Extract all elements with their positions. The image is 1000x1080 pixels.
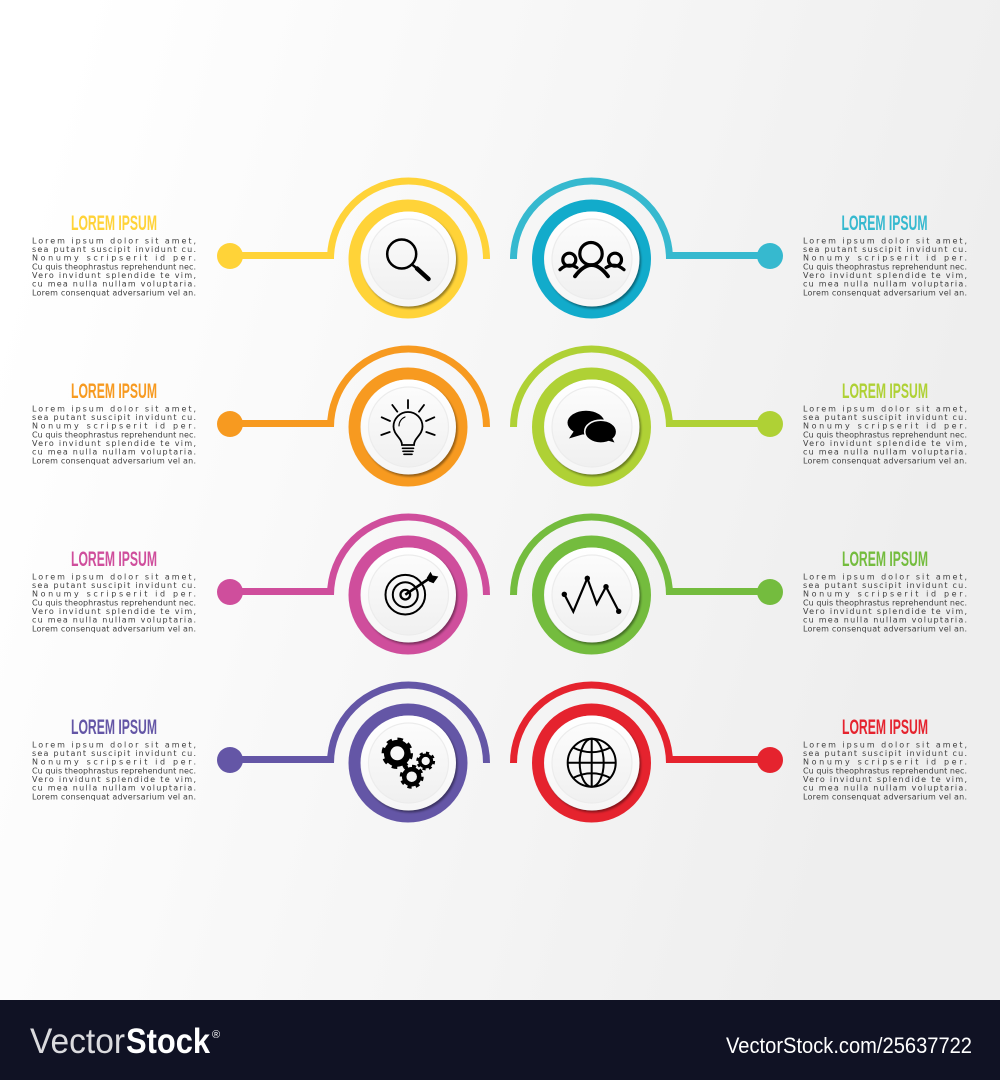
text block	[32, 236, 196, 297]
text block: Cu quis theophrastus reprehendunt nec.	[803, 598, 967, 607]
text block: Lorem ipsum dolor sit amet,	[32, 404, 196, 413]
text block: cu mea nulla nullam voluptaria.	[803, 616, 967, 625]
text block: Lorem consenquat adversarium vel an.	[803, 624, 967, 633]
footer logo: Vector	[30, 1022, 125, 1061]
text block: Lorem consenquat adversarium vel an.	[32, 792, 196, 801]
text block: Cu quis theophrastus reprehendunt nec.	[803, 430, 967, 439]
panel: orange step	[32, 349, 486, 480]
heading: LOREM IPSUM	[71, 548, 157, 571]
icon: light bulb	[381, 400, 435, 454]
text block: Vero invidunt splendide te vim,	[803, 775, 967, 784]
text block: cu mea nulla nullam voluptaria.	[32, 280, 196, 289]
text block: Lorem ipsum dolor sit amet,	[803, 404, 967, 413]
text block: Lorem consenquat adversarium vel an.	[803, 288, 967, 297]
text block: cu mea nulla nullam voluptaria.	[803, 280, 967, 289]
panel: yellow step	[32, 181, 486, 312]
text block: sea putant suscipit invidunt cu.	[32, 581, 196, 590]
red ring	[538, 710, 645, 816]
text block: Vero invidunt splendide te vim,	[803, 439, 967, 448]
text block: sea putant suscipit invidunt cu.	[32, 413, 196, 422]
text block: Lorem consenquat adversarium vel an.	[32, 288, 196, 297]
text block: Nonumy scripserit id per.	[32, 422, 196, 431]
footer logo: ®	[212, 1029, 220, 1041]
panel: red step	[514, 685, 967, 816]
yellow ring	[354, 206, 462, 312]
text block: sea putant suscipit invidunt cu.	[803, 749, 967, 758]
text block: cu mea nulla nullam voluptaria.	[803, 784, 967, 793]
text block: Lorem ipsum dolor sit amet,	[803, 740, 967, 749]
text block: Vero invidunt splendide te vim,	[32, 271, 196, 280]
text block: Cu quis theophrastus reprehendunt nec.	[803, 766, 967, 775]
connector: purple arc and line	[217, 685, 486, 773]
text block: cu mea nulla nullam voluptaria.	[32, 784, 196, 793]
text block: cu mea nulla nullam voluptaria.	[32, 616, 196, 625]
text block: Vero invidunt splendide te vim,	[32, 775, 196, 784]
connector: green arc and line	[514, 517, 783, 605]
heading: LOREM IPSUM	[71, 212, 157, 235]
text block: sea putant suscipit invidunt cu.	[32, 749, 196, 758]
icon: speech bubbles	[568, 411, 617, 443]
green ring	[538, 542, 645, 648]
text block: Vero invidunt splendide te vim,	[32, 439, 196, 448]
connector: lime arc and line	[514, 349, 783, 437]
text block: Vero invidunt splendide te vim,	[803, 271, 967, 280]
footer logo: Stock	[126, 1022, 210, 1061]
text block	[803, 236, 967, 297]
heading: LOREM IPSUM	[71, 716, 157, 739]
lime disc	[544, 380, 641, 476]
icon: target with arrow	[386, 572, 438, 614]
icon: zigzag line chart	[562, 576, 621, 614]
text block: sea putant suscipit invidunt cu.	[803, 581, 967, 590]
text block: cu mea nulla nullam voluptaria.	[803, 448, 967, 457]
green disc	[544, 548, 641, 644]
lime ring	[538, 374, 645, 480]
connector: orange arc and line	[217, 349, 486, 437]
yellow disc	[361, 212, 458, 308]
icon: globe	[568, 739, 616, 787]
text block: Cu quis theophrastus reprehendunt nec.	[32, 598, 196, 607]
footer bar	[0, 1000, 1000, 1080]
panel: purple step	[32, 685, 486, 816]
icon: magnifier	[387, 240, 428, 279]
text block: cu mea nulla nullam voluptaria.	[32, 448, 196, 457]
text block	[32, 740, 196, 801]
purple ring	[354, 710, 462, 816]
heading: LOREM IPSUM	[842, 548, 928, 571]
text block: Nonumy scripserit id per.	[803, 254, 967, 263]
text block: Lorem consenquat adversarium vel an.	[803, 792, 967, 801]
text block: sea putant suscipit invidunt cu.	[803, 413, 967, 422]
purple disc	[361, 716, 458, 812]
text block	[803, 404, 967, 465]
text block: Lorem consenquat adversarium vel an.	[803, 456, 967, 465]
connector: pink arc and line	[217, 517, 486, 605]
text block	[32, 572, 196, 633]
text block: Cu quis theophrastus reprehendunt nec.	[32, 262, 196, 271]
footer image id: VectorStock.com/25637722	[726, 1033, 972, 1058]
panel: pink step	[32, 517, 486, 648]
panel: green step	[514, 517, 967, 648]
connector: red arc and line	[514, 685, 783, 773]
heading: LOREM IPSUM	[71, 380, 157, 403]
teal disc	[544, 212, 641, 308]
icon: people	[560, 242, 624, 276]
text block	[32, 404, 196, 465]
orange disc	[361, 380, 458, 476]
text block: Lorem ipsum dolor sit amet,	[32, 236, 196, 245]
connector: yellow arc and line	[217, 181, 486, 269]
teal ring	[538, 206, 645, 312]
text block: Nonumy scripserit id per.	[32, 590, 196, 599]
text block: Cu quis theophrastus reprehendunt nec.	[32, 766, 196, 775]
heading: LOREM IPSUM	[842, 212, 928, 235]
text block: Lorem ipsum dolor sit amet,	[803, 572, 967, 581]
heading: LOREM IPSUM	[842, 716, 928, 739]
text block: Nonumy scripserit id per.	[32, 254, 196, 263]
panel: lime step	[514, 349, 967, 480]
orange ring	[354, 374, 462, 480]
text block	[803, 572, 967, 633]
text block: sea putant suscipit invidunt cu.	[803, 245, 967, 254]
text block: Lorem consenquat adversarium vel an.	[32, 624, 196, 633]
pink disc	[361, 548, 458, 644]
panel: teal step	[514, 181, 967, 312]
text block: Lorem ipsum dolor sit amet,	[803, 236, 967, 245]
text block: Cu quis theophrastus reprehendunt nec.	[32, 430, 196, 439]
text block: sea putant suscipit invidunt cu.	[32, 245, 196, 254]
text block: Vero invidunt splendide te vim,	[803, 607, 967, 616]
red disc	[544, 716, 641, 812]
footer logo	[30, 1022, 220, 1061]
text block: Lorem ipsum dolor sit amet,	[32, 740, 196, 749]
text block: Lorem consenquat adversarium vel an.	[32, 456, 196, 465]
text block	[803, 740, 967, 801]
text block: Nonumy scripserit id per.	[803, 758, 967, 767]
text block: Cu quis theophrastus reprehendunt nec.	[803, 262, 967, 271]
heading: LOREM IPSUM	[842, 380, 928, 403]
text block: Nonumy scripserit id per.	[32, 758, 196, 767]
text block: Nonumy scripserit id per.	[803, 422, 967, 431]
text block: Nonumy scripserit id per.	[803, 590, 967, 599]
icon: gears	[383, 739, 434, 787]
connector: teal arc and line	[514, 181, 783, 269]
text block: Vero invidunt splendide te vim,	[32, 607, 196, 616]
text block: Lorem ipsum dolor sit amet,	[32, 572, 196, 581]
pink ring	[354, 542, 462, 648]
